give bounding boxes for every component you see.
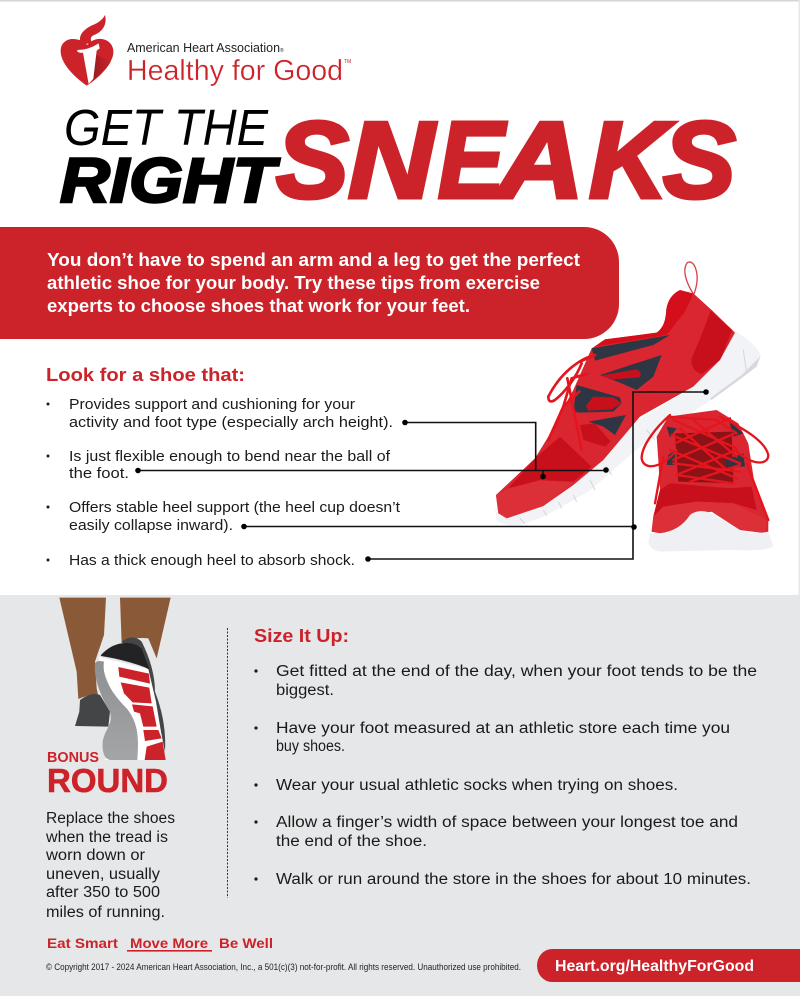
organisation name: American Heart Association [127, 41, 280, 55]
laces [548, 355, 595, 450]
title line: right: RIGHT [60, 146, 280, 216]
feature: support [46, 396, 393, 431]
intro text [47, 249, 580, 316]
heading: size it up: Size It Up: [254, 626, 349, 646]
front shoe [642, 410, 773, 552]
upper [652, 410, 768, 533]
feature: heel support: Offers stable heel support (the heel cup doesn’t [69, 499, 401, 516]
title word: sneaks: A [494, 100, 584, 222]
tip: measured: Have your foot measured at an athletic store each time you [276, 720, 730, 737]
dark tongue and panels [675, 432, 733, 483]
tip: socks: Wear your usual athletic socks when trying on shoes. [276, 777, 678, 794]
list: sizing tips [254, 663, 757, 888]
tip: end of day: biggest. [276, 682, 334, 699]
sole [648, 511, 773, 552]
heading: bonus round: BONUS [47, 750, 99, 766]
tip: finger's width [254, 814, 738, 850]
tagline: eat smart move more be well: Eat Smart [47, 935, 118, 951]
upper [496, 290, 735, 518]
mesh [653, 483, 757, 517]
heading: look for a shoe that: Look for a shoe that: [46, 365, 245, 385]
illustration: red running shoes [495, 262, 773, 552]
feature: flexibility: the foot. [69, 465, 129, 482]
title word: sneaks: E [438, 100, 507, 222]
heading: bonus round: ROUND [47, 762, 168, 799]
list: shoe features [46, 396, 401, 569]
logo: American Heart Association Healthy for Good [61, 15, 351, 87]
panel: grey lower section [0, 595, 800, 996]
heel loop [685, 262, 697, 294]
title word: sneaks: S [663, 100, 736, 222]
toe cap [496, 481, 573, 518]
text block: replace the shoes: worn down or [45, 847, 145, 864]
tip: end of day: Get fitted at the end of the day, when your foot tends to be the [276, 663, 757, 680]
feature: support: Provides support and cushioning for your [69, 396, 355, 413]
tagline: eat smart move more be well: Be Well [219, 935, 273, 951]
tip: walk or run: Walk or run around the store in the shoes for about 10 minutes. [276, 871, 751, 888]
tip: finger's width: Allow a finger’s width of space between your longest toe and [276, 814, 738, 831]
intro text: experts to choose shoes that work for your feet. [47, 295, 470, 316]
brand name: Healthy for Good [127, 55, 343, 87]
text block: replace the shoes [45, 810, 175, 921]
feature: heel support: easily collapse inward). [69, 517, 233, 534]
intro text: You don’t have to spend an arm and a leg to get the perfect [47, 249, 580, 270]
text block: replace the shoes: after 350 to 500 [46, 884, 160, 901]
website pill: Heart.org/HealthyForGood [555, 958, 754, 975]
feature: flexibility [46, 448, 391, 482]
title line: get the: GET THE [64, 99, 269, 156]
feature: support: activity and foot type (especially arch height). [69, 414, 393, 431]
copyright: © Copyright 2017 - 2024 American Heart Association, Inc., a 501(c)(3) not-for-profit. All rights reserved. Unauthorized use prohibited. [46, 962, 521, 972]
text block: replace the shoes: when the tread is [45, 829, 168, 846]
feature: heel support [46, 499, 401, 534]
tip: finger's width: the end of the shoe. [276, 833, 427, 850]
mesh panels [592, 335, 670, 361]
tip: measured: buy shoes. [276, 738, 345, 755]
illustration: runner's legs and sole [59, 598, 171, 760]
text block: replace the shoes: miles of running. [46, 904, 165, 921]
tip: end of day [254, 663, 757, 699]
text block: replace the shoes: uneven, usually [46, 866, 160, 883]
title word: sneaks: K [589, 100, 675, 222]
tagline: eat smart move more be well: Move More [130, 935, 208, 951]
trademark: TM [344, 59, 351, 65]
side shoe [495, 262, 761, 526]
tagline: eat smart move more be well [47, 935, 273, 952]
callout lines connecting features to shoe [135, 389, 709, 562]
panel: intro banner [0, 227, 619, 339]
title word: sneaks: N [348, 100, 436, 222]
registered mark: ® [280, 47, 284, 54]
feature: thick heel: Has a thick enough heel to absorb shock. [69, 552, 355, 569]
toe cap [652, 502, 767, 533]
feature: flexibility: Is just flexible enough to bend near the ball of [69, 448, 391, 465]
title [60, 99, 736, 222]
intro text: athletic shoe for your body. Try these tips from exercise [47, 272, 540, 293]
text block: replace the shoes: Replace the shoes [46, 810, 175, 827]
tip: measured [254, 720, 730, 755]
title word: sneaks [276, 100, 736, 222]
laces [642, 415, 768, 520]
sole [495, 331, 761, 526]
website pill [537, 949, 800, 982]
icon: heart and torch [61, 15, 113, 86]
title word: sneaks: S [276, 100, 349, 222]
